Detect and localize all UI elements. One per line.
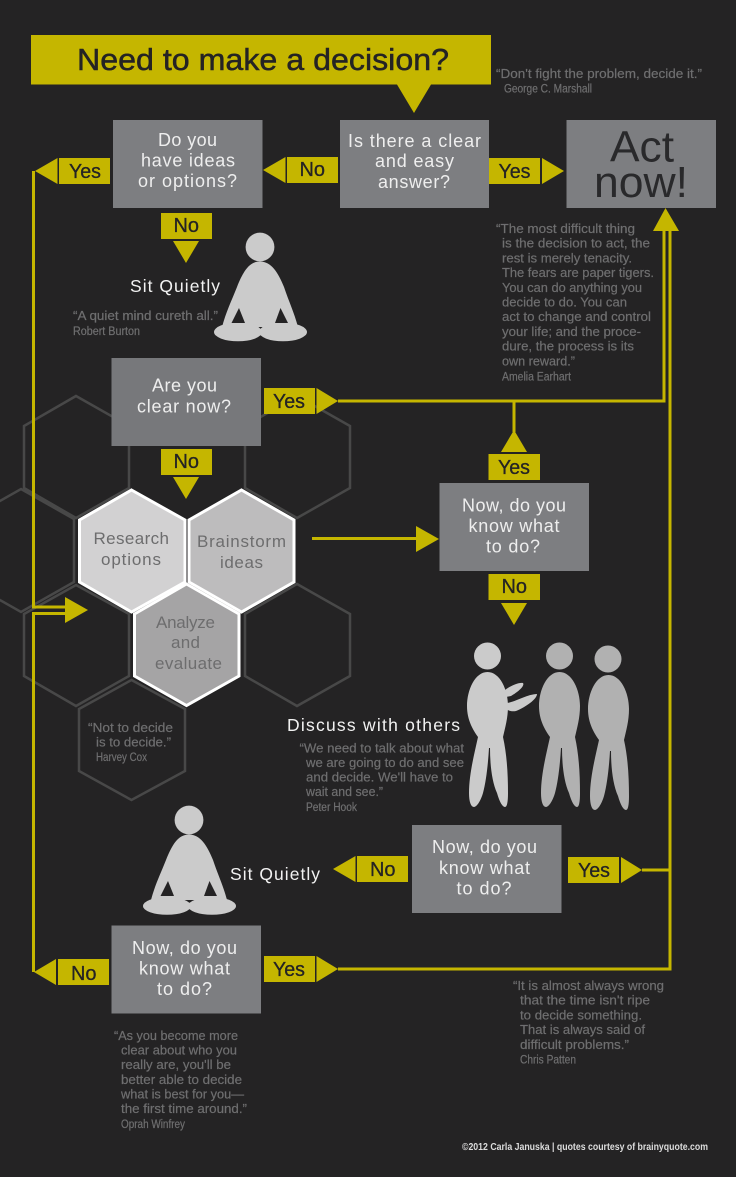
box: are you clear now: clear now? — [137, 396, 231, 416]
hexagon: analyze and evaluate: evaluate — [155, 654, 222, 673]
quote: Amelia Earhart: rest is merely tenacity. — [502, 250, 632, 265]
arrow: yes from box 3 — [264, 956, 338, 982]
quote: Amelia Earhart: your life; and the proce- — [502, 324, 641, 339]
quote: Oprah Winfrey — [114, 1028, 247, 1131]
icon: person listening 1 — [539, 642, 580, 807]
quote: Oprah Winfrey: “As you become more — [114, 1028, 238, 1043]
quote: Amelia Earhart — [496, 221, 654, 384]
arrow: yes to act now: Yes — [498, 161, 530, 183]
hexagon: brainstorm ideas: Brainstorm — [197, 532, 286, 551]
arrow: no to sit quietly: No — [174, 215, 199, 237]
arrow: yes to act now — [489, 158, 564, 184]
quote hexagon: Harvey Cox: Harvey Cox — [96, 752, 147, 764]
box: now do you know 3 — [112, 926, 261, 1014]
icon: person listening 2 — [588, 646, 629, 810]
quote: Oprah Winfrey: the first time around.” — [121, 1101, 247, 1116]
flow connector lines — [34, 171, 670, 972]
arrow: no from clear now: No — [174, 451, 199, 473]
quote: Chris Patten: Chris Patten — [520, 1054, 576, 1066]
box: now do you know 3: to do? — [157, 979, 212, 999]
arrow: no to sit quietly — [161, 213, 212, 263]
quote: Chris Patten: “It is almost always wrong — [513, 978, 664, 993]
quote: Chris Patten: to decide something. — [520, 1008, 642, 1022]
arrow: yes from clear now — [264, 388, 338, 414]
quote: Peter Hook: “We need to talk about what — [300, 740, 464, 756]
box: now do you know 2: to do? — [456, 878, 512, 898]
quote: Robert Burton — [73, 308, 218, 338]
arrow: yes up to act now rail: Yes — [498, 457, 530, 479]
quote: Amelia Earhart: You can do anything you — [502, 280, 642, 295]
arrow: yes up to act now rail — [488, 430, 540, 480]
box: do you have ideas — [113, 120, 262, 208]
icon: meditating figure lower — [143, 806, 236, 915]
hexagon: brainstorm ideas — [189, 490, 294, 612]
title banner — [31, 35, 491, 113]
arrow: no to left rail: No — [71, 963, 96, 985]
quote: Oprah Winfrey: clear about who you — [121, 1042, 237, 1058]
quote: Peter Hook: we are going to do and see — [305, 755, 464, 770]
arrow: yes from clear now: Yes — [273, 391, 305, 413]
quote: Chris Patten: difficult problems.” — [520, 1037, 629, 1052]
box: now do you know 2 — [412, 825, 562, 913]
box: is there a clear answer: Is there a clear — [348, 131, 481, 151]
quote: Oprah Winfrey: Oprah Winfrey — [121, 1119, 185, 1131]
box: now do you know 2: know what — [439, 858, 530, 878]
icon: person talking — [467, 642, 537, 807]
box: is there a clear answer: answer? — [378, 172, 450, 192]
quote: Amelia Earhart: The fears are paper tigers. — [502, 265, 654, 280]
arrowhead: into now do you know — [416, 526, 439, 552]
box: act now: Act — [610, 122, 674, 172]
box: are you clear now: Are you — [152, 376, 217, 396]
box: do you have ideas: or options? — [138, 171, 237, 191]
quote: Amelia Earhart: act to change and control — [502, 309, 651, 324]
arrow: yes from box 2: Yes — [578, 860, 610, 882]
hexagon: analyze and evaluate: and — [171, 633, 200, 652]
box: now do you know 3: Now, do you — [132, 938, 237, 958]
quote: Oprah Winfrey: really are, you'll be — [121, 1057, 231, 1072]
arrow: yes to left rail — [35, 158, 110, 184]
box: now do you know 1 — [440, 483, 589, 571]
quote: Amelia Earhart: “The most difficult thing — [496, 221, 635, 236]
arrowhead: into act now — [653, 208, 679, 231]
box: act now: now! — [594, 158, 688, 207]
arrow: no to sit quietly lower — [333, 856, 408, 882]
hexagon: research options — [80, 490, 185, 612]
label: discuss with others: Discuss with others — [287, 715, 460, 735]
arrow: no to ideas — [263, 157, 338, 183]
quote: Chris Patten: That is always said of — [520, 1022, 645, 1037]
arrow: no from clear now — [161, 449, 212, 499]
label: sit quietly lower: Sit Quietly — [230, 864, 320, 884]
box: act now — [566, 120, 716, 208]
quote: Amelia Earhart: is the decision to act, the — [502, 236, 650, 251]
hexagon: research options: options — [101, 550, 161, 569]
arrow: no to sit quietly lower: No — [370, 859, 396, 881]
arrow: yes from box 2 — [568, 857, 642, 883]
quote: George C. Marshall: “Don't fight the problem, decide it.” — [496, 66, 702, 81]
arrow: no to ideas: No — [300, 159, 325, 181]
box: now do you know 1: to do? — [486, 537, 540, 557]
quote: Peter Hook: and decide. We'll have to — [306, 770, 453, 784]
box: is there a clear answer: and easy — [375, 151, 454, 171]
box: now do you know 3: know what — [139, 958, 230, 978]
quote: Amelia Earhart: Amelia Earhart — [502, 372, 572, 384]
quote: Chris Patten: that the time isn't ripe — [520, 993, 650, 1008]
hexagon: research options: Research — [94, 529, 169, 548]
box: do you have ideas: Do you — [158, 130, 217, 150]
box: now do you know 2: Now, do you — [432, 837, 537, 857]
arrow: yes from box 3: Yes — [273, 959, 305, 981]
quote hexagon: Harvey Cox: is to decide.” — [96, 734, 171, 750]
quote hexagon: Harvey Cox — [79, 680, 185, 800]
box: are you clear now — [112, 358, 261, 446]
box: now do you know 1: know what — [468, 516, 560, 536]
quote: Robert Burton: “A quiet mind cureth all.” — [73, 308, 218, 323]
arrow: no to discuss: No — [502, 576, 527, 598]
quote: Amelia Earhart: dure, the process is its — [502, 339, 635, 354]
quote: Amelia Earhart: own reward.” — [502, 353, 575, 368]
quote: Oprah Winfrey: better able to decide — [121, 1072, 242, 1087]
box: do you have ideas: have ideas — [141, 150, 235, 170]
arrow: no to discuss — [488, 574, 540, 625]
quote: Amelia Earhart: decide to do. You can — [502, 294, 627, 310]
icon: meditating figure — [214, 233, 307, 341]
quote: Robert Burton: Robert Burton — [73, 326, 140, 338]
arrow: no to left rail — [34, 959, 109, 985]
quote: Peter Hook: Peter Hook — [306, 802, 357, 814]
hexagon: brainstorm ideas: ideas — [220, 553, 263, 572]
background hexagon pattern — [0, 396, 350, 706]
quote hexagon: Harvey Cox: “Not to decide — [88, 720, 173, 735]
quote: Chris Patten — [513, 978, 664, 1066]
box: is there a clear answer — [340, 120, 489, 208]
quote: Peter Hook: wait and see.” — [305, 784, 383, 799]
hexagon: analyze and evaluate: Analyze — [156, 613, 215, 632]
arrowhead: into research hexagons — [65, 597, 88, 623]
footer credit: ©2012 Carla Januska | quotes courtesy of brainyquote.com — [462, 1142, 708, 1153]
quote: Oprah Winfrey: what is best for you— — [120, 1086, 244, 1102]
box: now do you know 1: Now, do you — [462, 496, 566, 516]
arrow: yes to left rail: Yes — [69, 161, 101, 183]
quote: George C. Marshall — [496, 66, 702, 96]
hexagon: analyze and evaluate — [134, 584, 239, 706]
label: sit quietly: Sit Quietly — [130, 276, 220, 296]
quote: George C. Marshall: George C. Marshall — [504, 84, 592, 96]
title banner: Need to make a decision? — [77, 42, 449, 77]
quote: Peter Hook — [300, 740, 464, 814]
